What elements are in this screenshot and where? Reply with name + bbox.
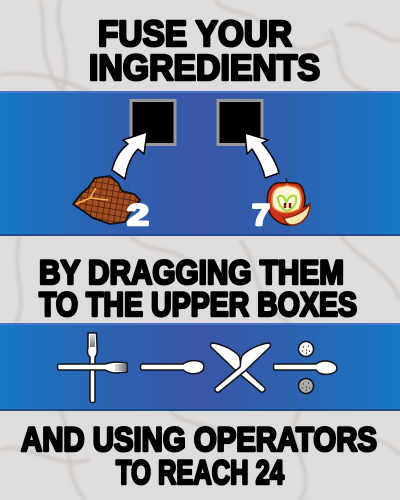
arrow: right (245, 133, 279, 178)
heading: and using operators to reach 24 (21, 421, 377, 492)
heading: and using operators to reach 24: TO REACH 24 (116, 454, 284, 492)
heading: fuse your ingredients: INGREDIENTS (89, 47, 320, 88)
heading: fuse your ingredients: FUSE YOUR (98, 13, 292, 54)
icon: multiply (knives) (211, 343, 270, 392)
number 7: 7 (252, 199, 270, 232)
upper box left (131, 100, 175, 144)
icon: plus (two forks) (58, 333, 127, 402)
icon: minus (spoon) (140, 361, 204, 374)
icon: apple (267, 178, 310, 225)
panel: ingredients band (0, 91, 400, 236)
arrow: left (112, 132, 147, 179)
upper box right (218, 100, 262, 144)
heading: by dragging them to the upper boxes (39, 254, 357, 324)
panel: operators band (0, 323, 400, 411)
heading: fuse your ingredients (89, 13, 320, 88)
icon: divide (spoon and dots) (274, 342, 337, 394)
number 2: 2 (127, 199, 149, 232)
heading: by dragging them to the upper boxes: BY DRAGGING THEM (39, 254, 344, 292)
icon: steak (73, 176, 140, 224)
